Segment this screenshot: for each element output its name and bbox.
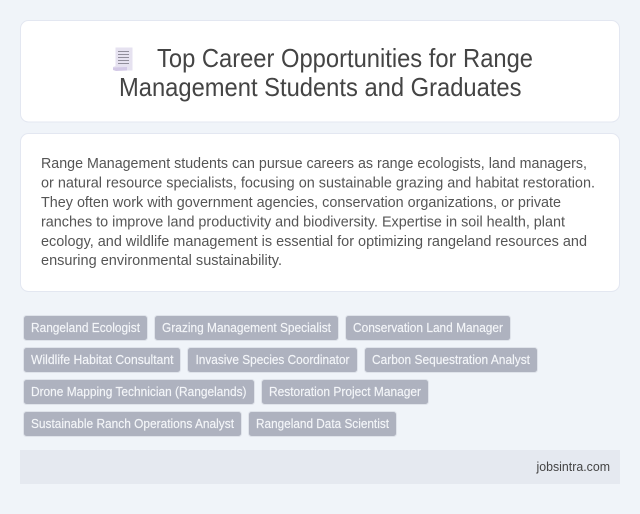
title [119,43,533,102]
description text [41,155,595,269]
tag: Restoration Project Manager: Restoration Project Manager [269,384,422,399]
icon: paper scroll document [113,48,132,71]
description text: ecology, and wildlife management is essential for optimizing rangeland resources and [41,233,587,250]
description text: or natural resource specialists, focusing on sustainable grazing and habitat restoration. [41,174,595,192]
description text: Range Management students can pursue careers as range ecologists, land managers, [41,155,587,172]
title: Top Career Opportunities for Range [157,43,533,73]
title: Management Students and Graduates [119,72,522,102]
panel: description [20,134,620,292]
tag: Grazing Management Specialist: Grazing Management Specialist [162,320,331,335]
tag: Rangeland Data Scientist: Rangeland Data Scientist [256,416,389,431]
tag: Sustainable Ranch Operations Analyst: Sustainable Ranch Operations Analyst [31,416,234,431]
tag: Drone Mapping Technician (Rangelands): Drone Mapping Technician (Rangelands) [31,384,246,399]
tag: Carbon Sequestration Analyst: Carbon Sequestration Analyst [372,352,530,367]
tag: Wildlife Habitat Consultant [24,348,180,372]
tag: Invasive Species Coordinator [188,348,358,372]
tag: Rangeland Ecologist [24,316,148,340]
tag: Wildlife Habitat Consultant: Wildlife Habitat Consultant [31,352,174,367]
tag: Conservation Land Manager: Conservation Land Manager [353,320,504,335]
tag: Sustainable Ranch Operations Analyst [24,412,242,436]
tag: Invasive Species Coordinator: Invasive Species Coordinator [196,352,350,367]
description text: ensuring environmental sustainability. [41,252,282,269]
tag: Carbon Sequestration Analyst [364,348,538,372]
tag: Restoration Project Manager [262,380,428,404]
footer bar [20,450,620,484]
tag: Grazing Management Specialist [154,316,338,340]
career tags [24,316,538,436]
description text: They often work with government agencies, conservation organizations, or private [41,194,561,211]
tag: Drone Mapping Technician (Rangelands) [24,380,254,404]
description text: ranches to improve land productivity and biodiversity. Expertise in soil health, plant [41,214,566,230]
panel: title header [20,20,620,122]
footer source text: jobsintra.com [536,459,610,474]
tag: Rangeland Ecologist: Rangeland Ecologist [31,320,140,335]
tag: Conservation Land Manager [346,316,510,340]
tag: Rangeland Data Scientist [248,412,396,436]
